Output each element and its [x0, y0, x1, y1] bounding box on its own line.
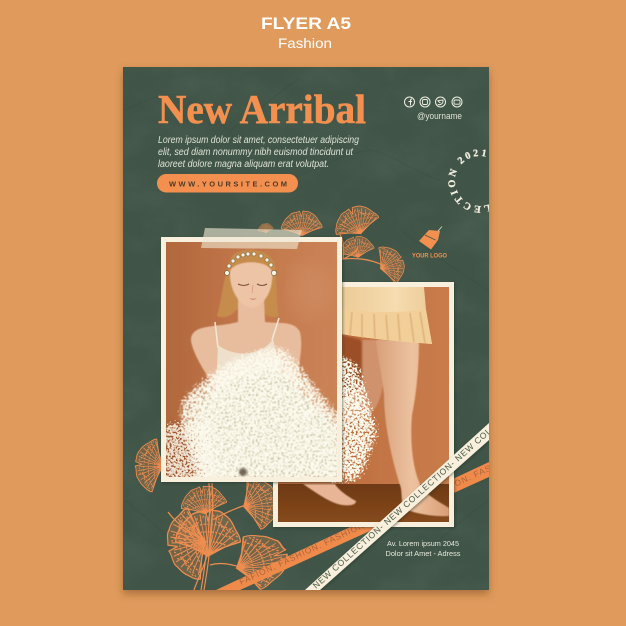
front leg	[376, 340, 449, 516]
intro paragraph: elit, sed diam nonummy nibh euismod tincidunt ut	[158, 147, 354, 158]
social icons	[404, 97, 462, 107]
baby's breath spill	[332, 356, 379, 484]
intro paragraph: laoreet dolore magna aliquam erat volutpat.	[158, 159, 329, 170]
neck and shoulders	[190, 298, 302, 389]
flower crown	[225, 252, 277, 276]
botanical illustration: bottom ginkgo leaves	[133, 437, 295, 594]
website button	[157, 174, 298, 192]
panel: flyer poster	[123, 67, 489, 590]
circular text: 2021 collection	[448, 150, 489, 213]
skirt with ruffle	[342, 287, 432, 344]
hair	[217, 250, 279, 317]
subheading: category: Fashion	[278, 35, 332, 51]
photo card: legs and dress	[273, 282, 454, 527]
dark stems	[239, 468, 247, 476]
washi tape	[201, 228, 302, 249]
scattered blossoms lower left	[166, 418, 221, 477]
photo wall	[166, 242, 337, 477]
face	[230, 262, 272, 308]
bouquet blossoms	[177, 345, 337, 477]
circular text: 2021 collection: COLLECTION 2021	[448, 150, 489, 213]
ribbon: cream new collection tape: NEW COLLECTION- NEW COLLECTION- NEW COLLECTION- NEW COLLECTION	[311, 333, 597, 590]
logo: price tag: YOUR LOGO	[412, 252, 447, 260]
address block: Dolor sit Amet - Adress	[386, 549, 461, 558]
ribbon: cream new collection tape	[305, 423, 489, 590]
website button: WWW.YOURSITE.COM	[169, 180, 287, 188]
photo card: woman with bouquet	[160, 237, 350, 490]
heading: flyer size: FLYER A5	[261, 14, 351, 33]
ribbon: orange fashion tape: FAFION, FASHION. FASHION. FASHION.	[238, 497, 415, 587]
back foot	[303, 484, 356, 505]
photo wall	[278, 287, 449, 485]
intro paragraph	[158, 135, 359, 170]
address block	[386, 539, 461, 558]
ribbon: orange fashion tape: ION. FASHION.	[450, 450, 519, 490]
logo: price tag	[412, 226, 447, 260]
address block: Av. Lorem ipsum 2045	[387, 539, 459, 548]
title: New Arribal	[158, 86, 366, 132]
photo wooden floor	[278, 484, 449, 522]
bouquet shadow base	[197, 371, 337, 477]
intro paragraph: Lorem ipsum dolor sit amet, consectetuer adipiscing	[158, 135, 359, 146]
botanical illustration: top ginkgo leaves	[258, 206, 405, 282]
ribbon: orange fashion tape	[216, 462, 489, 590]
back leg	[342, 340, 385, 425]
straps and lace top	[215, 318, 279, 348]
social username: @yourname	[417, 111, 462, 121]
